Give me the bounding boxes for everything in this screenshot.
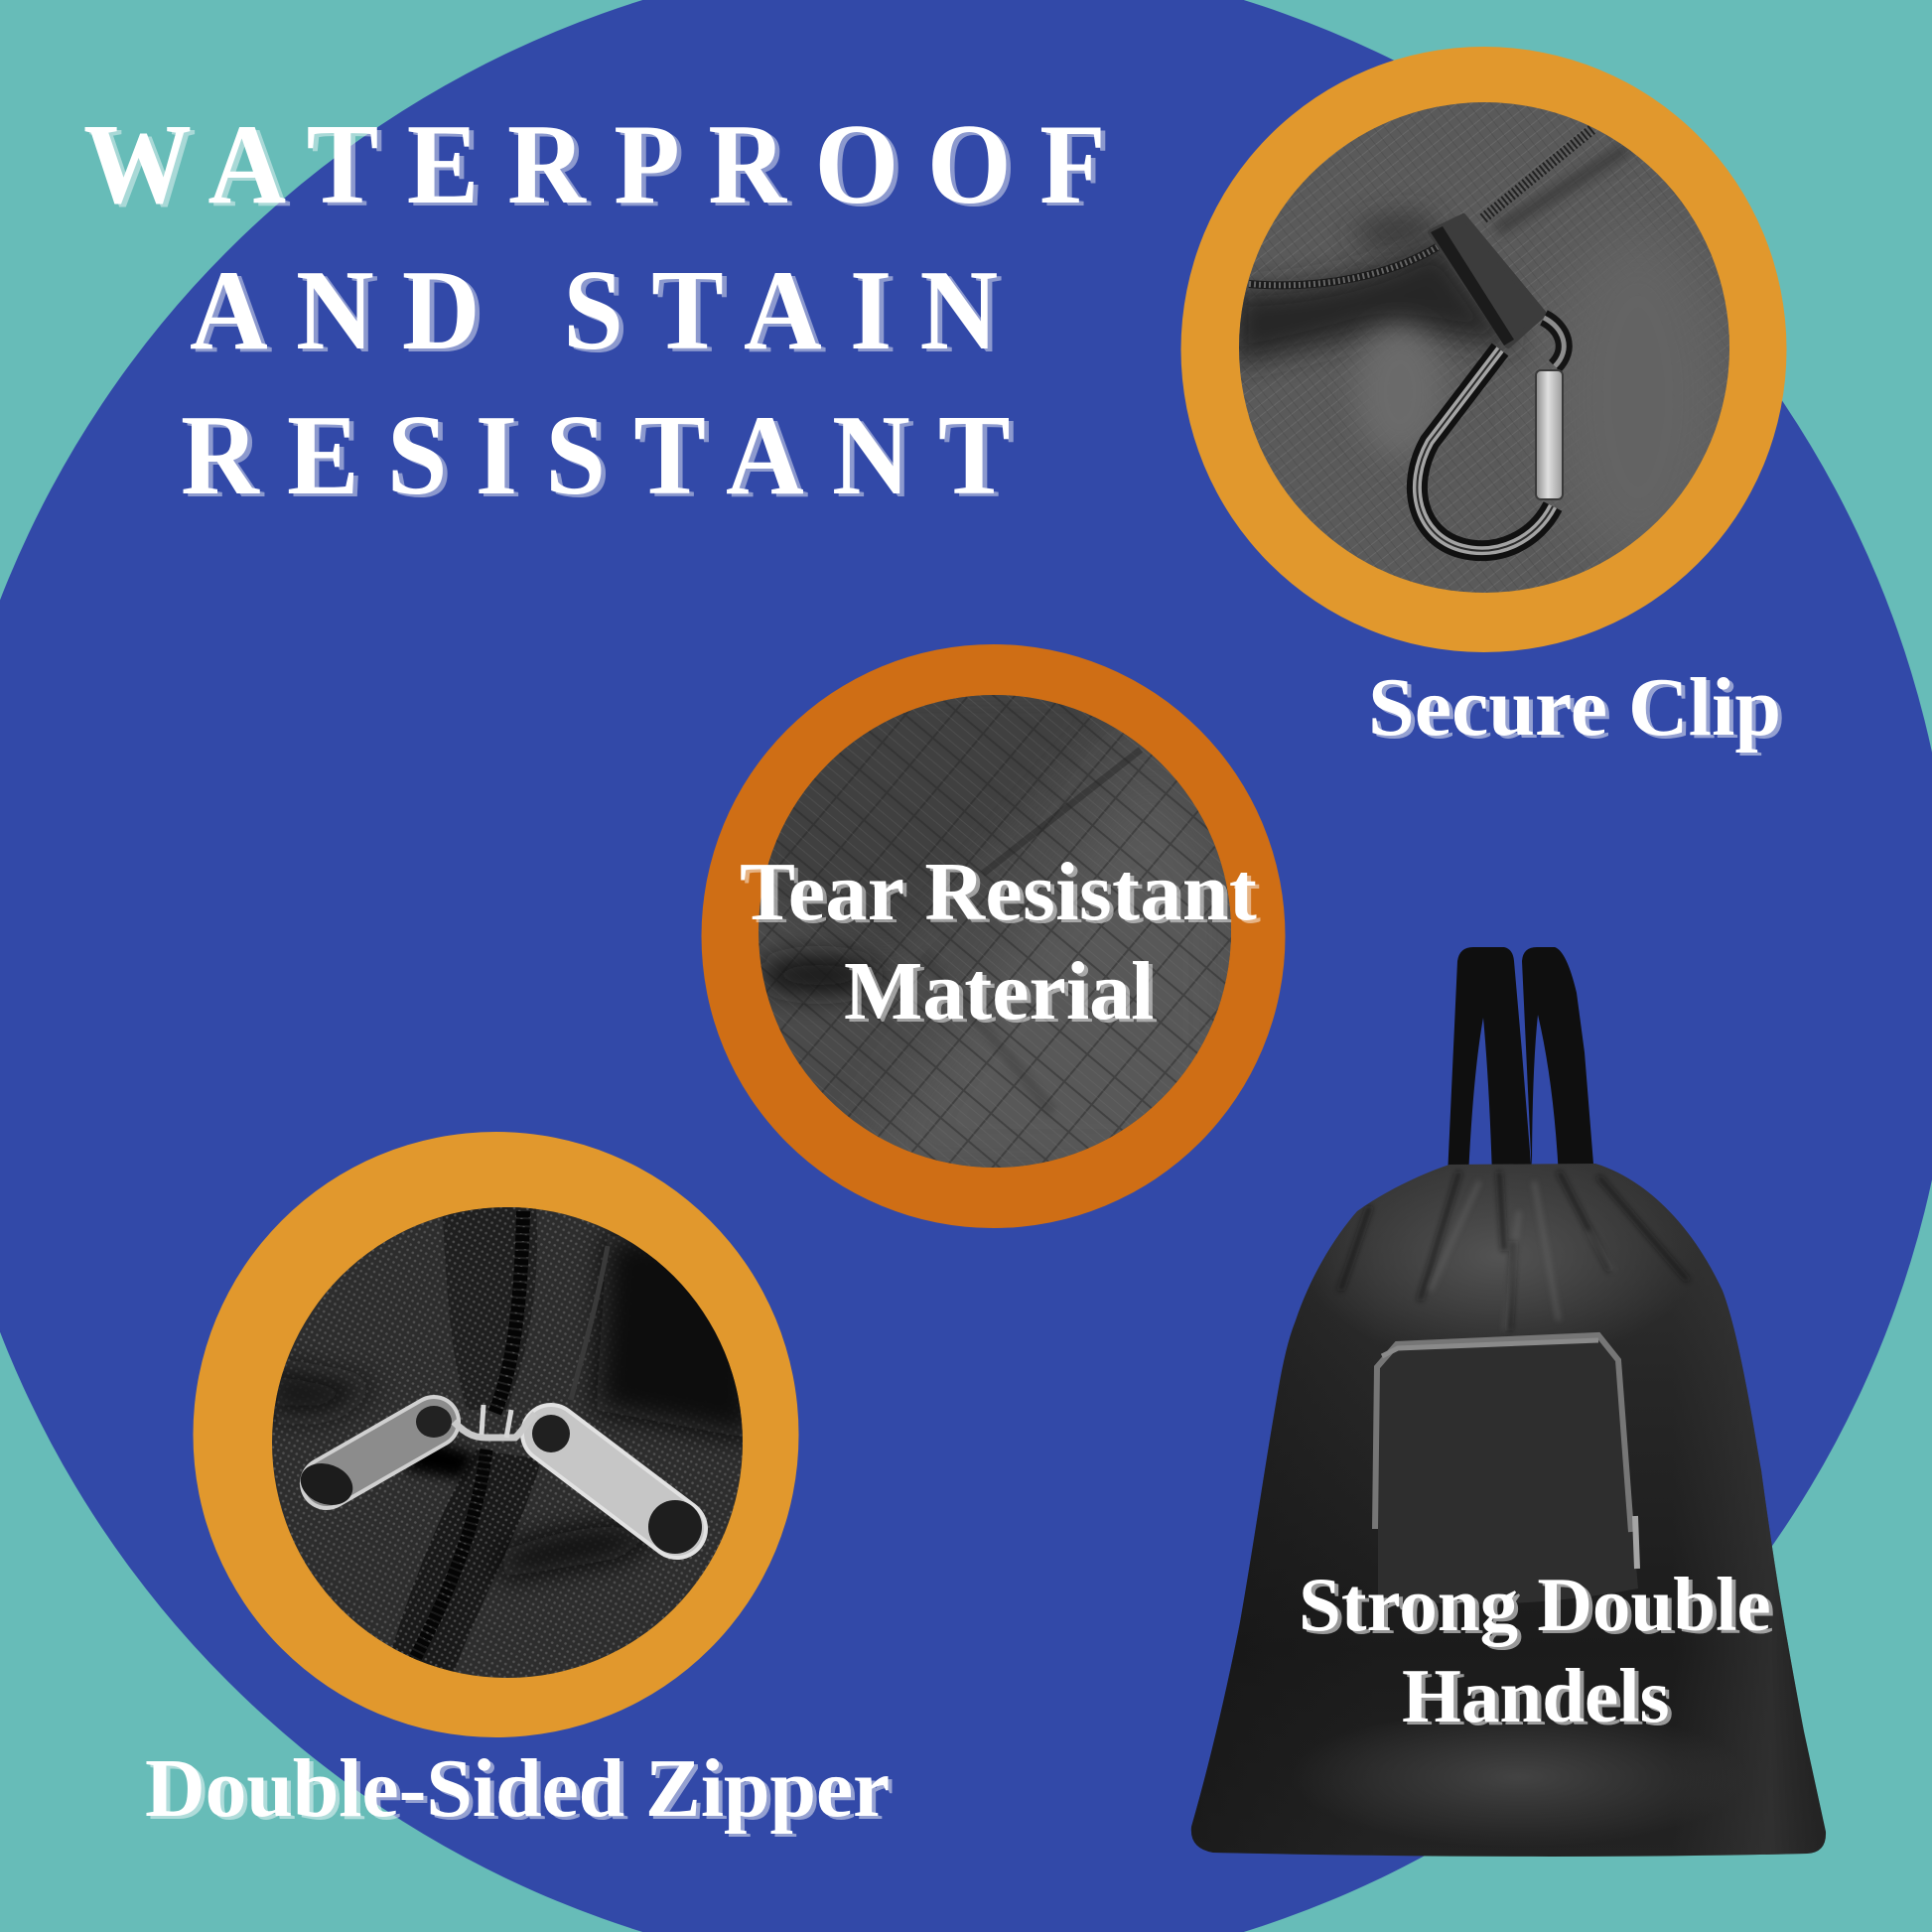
label: tear resistant material: Tear Resistant bbox=[740, 846, 1257, 938]
bag front pocket bbox=[1375, 1335, 1638, 1604]
label: strong double handels: Handels bbox=[1402, 1653, 1670, 1738]
title: RESISTANT bbox=[181, 392, 1038, 519]
bag highlights and folds bbox=[1181, 1147, 1837, 1857]
title bbox=[83, 101, 1134, 519]
label: double-sided zipper: Double-Sided Zipper bbox=[145, 1742, 890, 1835]
label: tear resistant material: Material bbox=[844, 945, 1154, 1037]
photo: zipper and pulls bbox=[268, 1201, 755, 1688]
title: WATERPROOF bbox=[83, 101, 1134, 228]
label: tear resistant material bbox=[740, 846, 1261, 1037]
right zipper pull bbox=[551, 1434, 677, 1529]
photo: fabric and carabiner bbox=[1231, 94, 1737, 601]
carabiner bbox=[1544, 318, 1564, 366]
panel: secure clip photo circle bbox=[1181, 47, 1787, 652]
bag body bbox=[1191, 1164, 1826, 1857]
panel: double zipper photo circle bbox=[193, 1132, 798, 1737]
zipper slider connector bbox=[454, 1414, 535, 1438]
left zipper pull bbox=[327, 1422, 434, 1483]
zipper teeth bbox=[1249, 246, 1439, 285]
zipper teeth bbox=[494, 1211, 523, 1414]
panel: tear resistant photo circle bbox=[701, 644, 1285, 1228]
panel: laundry bag bbox=[1181, 947, 1837, 1857]
label: strong double handels bbox=[1299, 1562, 1773, 1738]
label: secure clip: Secure Clip bbox=[1368, 661, 1781, 754]
title: AND STAIN bbox=[190, 247, 1027, 374]
bag straps bbox=[1448, 947, 1594, 1176]
strap loop bbox=[1431, 216, 1544, 345]
label: strong double handels: Strong Double bbox=[1299, 1562, 1771, 1647]
photo: ripstop fabric bbox=[755, 690, 1241, 1181]
